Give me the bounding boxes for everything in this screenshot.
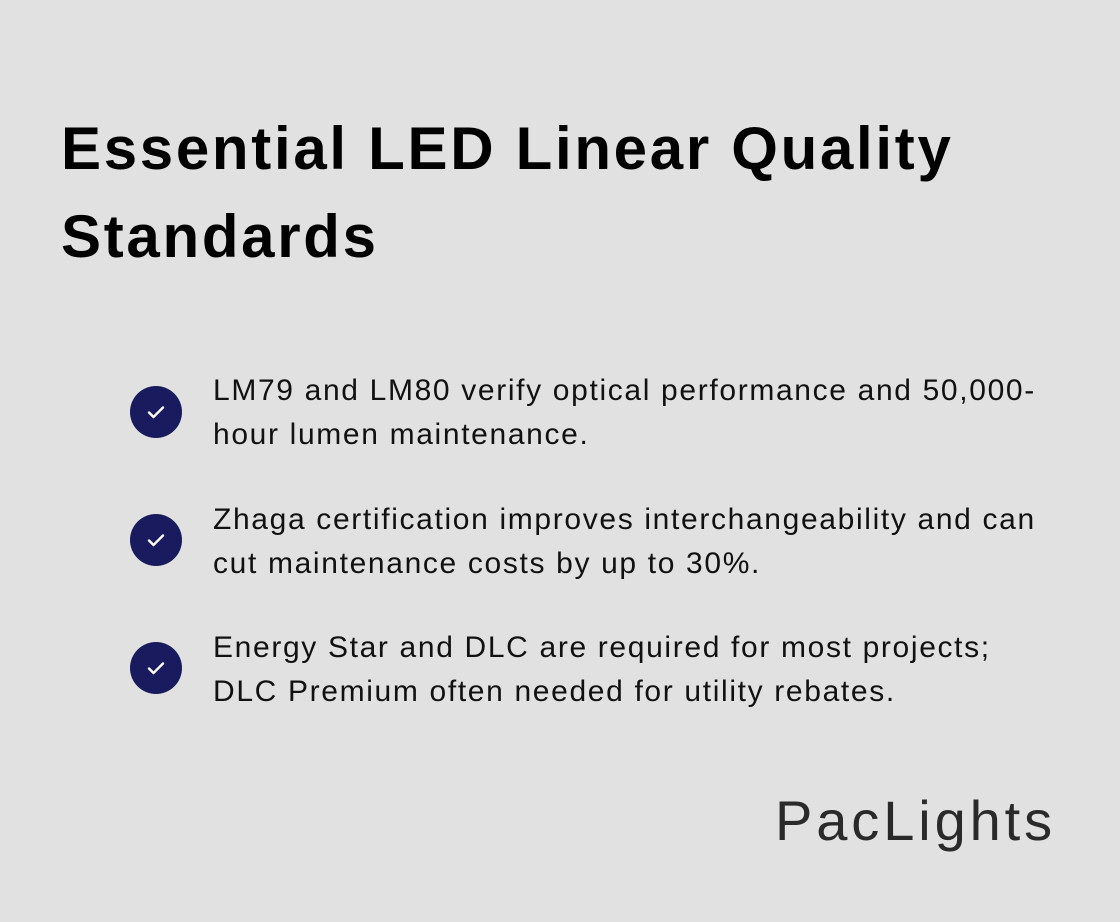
text 1: hour lumen maintenance. — [213, 418, 590, 451]
title — [61, 115, 954, 270]
item 2 — [130, 503, 1036, 580]
text 1: LM79 and LM80 verify optical performance and 50,000- — [213, 374, 1036, 407]
text 2: Zhaga certification improves interchangeability and can — [213, 503, 1036, 536]
text 3: DLC Premium often needed for utility rebates. — [213, 675, 896, 708]
text 2 — [213, 503, 1036, 580]
text 3: Energy Star and DLC are required for most projects; — [213, 631, 991, 664]
text 3 — [213, 631, 991, 708]
title: Standards — [61, 203, 379, 270]
icon: check — [130, 514, 182, 566]
item 3 — [130, 631, 991, 708]
text 2: cut maintenance costs by up to 30%. — [213, 547, 761, 580]
icon: check — [130, 642, 182, 694]
logo: PacLights — [775, 789, 1056, 852]
title: Essential LED Linear Quality — [61, 115, 954, 182]
icon: check — [130, 386, 182, 438]
item 1 — [130, 374, 1036, 451]
text 1 — [213, 374, 1036, 451]
